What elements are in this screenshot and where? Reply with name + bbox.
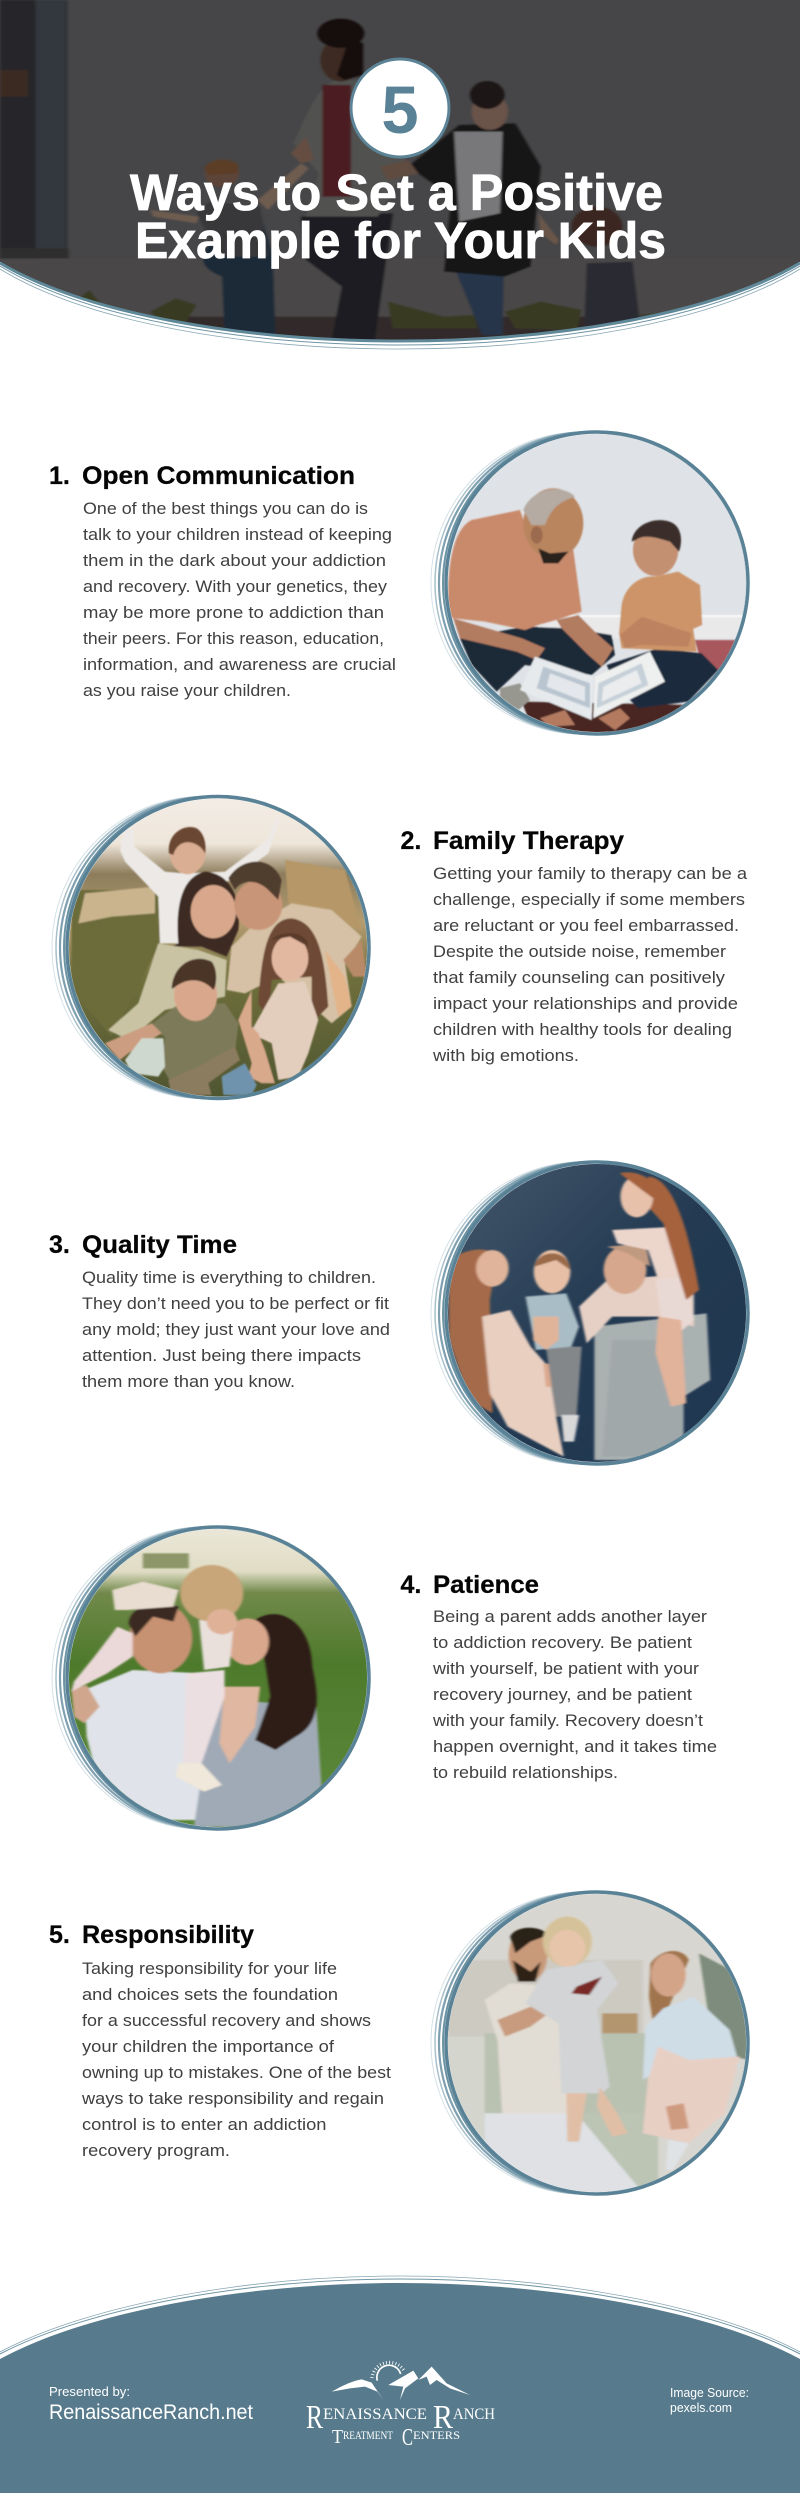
heading 2: 2.	[400, 827, 421, 855]
photo ring 3	[431, 1162, 748, 1464]
body text 4	[432, 1608, 717, 1782]
body text 1: talk to your children instead of keeping	[83, 526, 392, 544]
heading 4: 4.	[400, 1571, 421, 1599]
number badge: 5	[381, 73, 419, 148]
body text 5: Taking responsibility for your life	[82, 1960, 337, 1978]
image source	[670, 2386, 749, 2415]
title: Ways to Set a Positive	[130, 164, 663, 221]
body text 4: to rebuild relationships.	[433, 1764, 618, 1782]
title: Example for Your Kids	[135, 212, 666, 269]
body text 2: are reluctant or you feel embarrassed.	[433, 917, 739, 935]
footer background	[0, 2283, 800, 2493]
body text 1: and recovery. With your genetics, they	[83, 578, 388, 596]
photo: family in meadow	[66, 795, 370, 1099]
body text 5	[81, 1960, 391, 2160]
body text 5: owning up to mistakes. One of the best	[82, 2064, 391, 2082]
panel: quality time	[49, 1161, 749, 1465]
photo ring 2	[52, 796, 369, 1098]
body text 3	[82, 1269, 390, 1391]
body text 2: impact your relationships and provide	[433, 995, 738, 1013]
logo: renaissance ranch	[306, 2362, 495, 2451]
panel: patience	[52, 1526, 717, 1830]
body text 4: with yourself, be patient with your	[432, 1660, 700, 1678]
logo: renaissance ranch: ENAISSANCE	[323, 2406, 427, 2423]
body text 3: any mold; they just want your love and	[82, 1321, 390, 1339]
photo: parents with two children	[445, 1161, 749, 1465]
logo mountains and sun	[332, 2362, 470, 2400]
photo ring 1	[431, 432, 748, 734]
header photo: family walking	[0, 0, 800, 347]
footer band	[0, 2276, 800, 2493]
body text 2: challenge, especially if some members	[433, 891, 745, 909]
body text 2: that family counseling can positively	[433, 969, 726, 987]
logo: renaissance ranch: T	[332, 2426, 343, 2448]
body text 3: attention. Just being there impacts	[82, 1347, 361, 1365]
body text 3: Quality time is everything to children.	[82, 1269, 376, 1287]
body text 3: They don’t need you to be perfect or fit	[82, 1295, 389, 1313]
presented by	[49, 2384, 253, 2424]
logo: renaissance ranch: R	[306, 2399, 323, 2436]
body text 1: information, and awareness are crucial	[83, 656, 396, 674]
logo: renaissance ranch: REATMENT	[343, 2430, 393, 2442]
logo: renaissance ranch: R	[433, 2399, 453, 2436]
panel: open communication	[49, 431, 749, 735]
image source: pexels.com	[670, 2401, 732, 2415]
panel: family therapy	[52, 795, 748, 1099]
body text 5: control is to enter an addiction	[82, 2116, 326, 2134]
number badge	[351, 59, 449, 157]
logo: renaissance ranch: C	[402, 2425, 413, 2451]
body text 4: happen overnight, and it takes time	[433, 1738, 717, 1756]
body text 2: children with healthy tools for dealing	[433, 1021, 732, 1039]
body text 2: Getting your family to therapy can be a	[433, 865, 748, 883]
photo: parents lifting toddler	[439, 1891, 750, 2195]
body text 5: your children the importance of	[82, 2038, 334, 2056]
heading 2: Family Therapy	[433, 827, 624, 855]
presented by: RenaissanceRanch.net	[49, 2401, 253, 2424]
body text 5: for a successful recovery and shows	[82, 2012, 371, 2030]
body text 4: recovery journey, and be patient	[433, 1686, 692, 1704]
body text 4: to addiction recovery. Be patient	[433, 1634, 692, 1652]
heading 5: Responsibility	[82, 1921, 254, 1949]
photo ring 5	[431, 1892, 748, 2194]
body text 5: and choices sets the foundation	[82, 1986, 338, 2004]
presented by: Presented by:	[49, 2384, 130, 2399]
body text 1: One of the best things you can do is	[83, 500, 368, 518]
body text 4: Being a parent adds another layer	[433, 1608, 708, 1626]
photo: couple with daughter	[66, 1526, 370, 1830]
body text 2: Despite the outside noise, remember	[433, 943, 727, 961]
heading 1: 1.	[49, 462, 70, 490]
body text 2: with big emotions.	[432, 1047, 579, 1065]
logo: renaissance ranch: ANCH	[453, 2406, 495, 2423]
body text 1: may be more prone to addiction than	[83, 604, 384, 622]
body text 2	[432, 865, 748, 1065]
body text 5: ways to take responsibility and regain	[81, 2090, 384, 2108]
body text 1: them in the dark about your addiction	[83, 552, 386, 570]
heading 3: Quality Time	[82, 1231, 237, 1259]
body text 4: with your family. Recovery doesn’t	[432, 1712, 703, 1730]
title	[130, 164, 666, 269]
body text 3: them more than you know.	[82, 1373, 295, 1391]
header curve lines	[0, 263, 800, 349]
heading 4: Patience	[433, 1571, 539, 1599]
photo ring 4	[52, 1527, 369, 1829]
heading 5: 5.	[49, 1921, 70, 1949]
panel: responsibility	[49, 1891, 750, 2195]
photo: father and son reading	[445, 431, 749, 735]
body text 1	[83, 500, 396, 700]
logo: renaissance ranch: ENTERS	[413, 2430, 460, 2442]
body text 5: recovery program.	[82, 2142, 230, 2160]
image source: Image Source:	[670, 2386, 749, 2400]
body text 1: as you raise your children.	[83, 682, 291, 700]
footer curve lines	[0, 2276, 800, 2354]
header banner	[0, 0, 800, 349]
heading 1: Open Communication	[82, 462, 355, 490]
heading 3: 3.	[49, 1231, 70, 1259]
body text 1: their peers. For this reason, education,	[83, 630, 384, 648]
